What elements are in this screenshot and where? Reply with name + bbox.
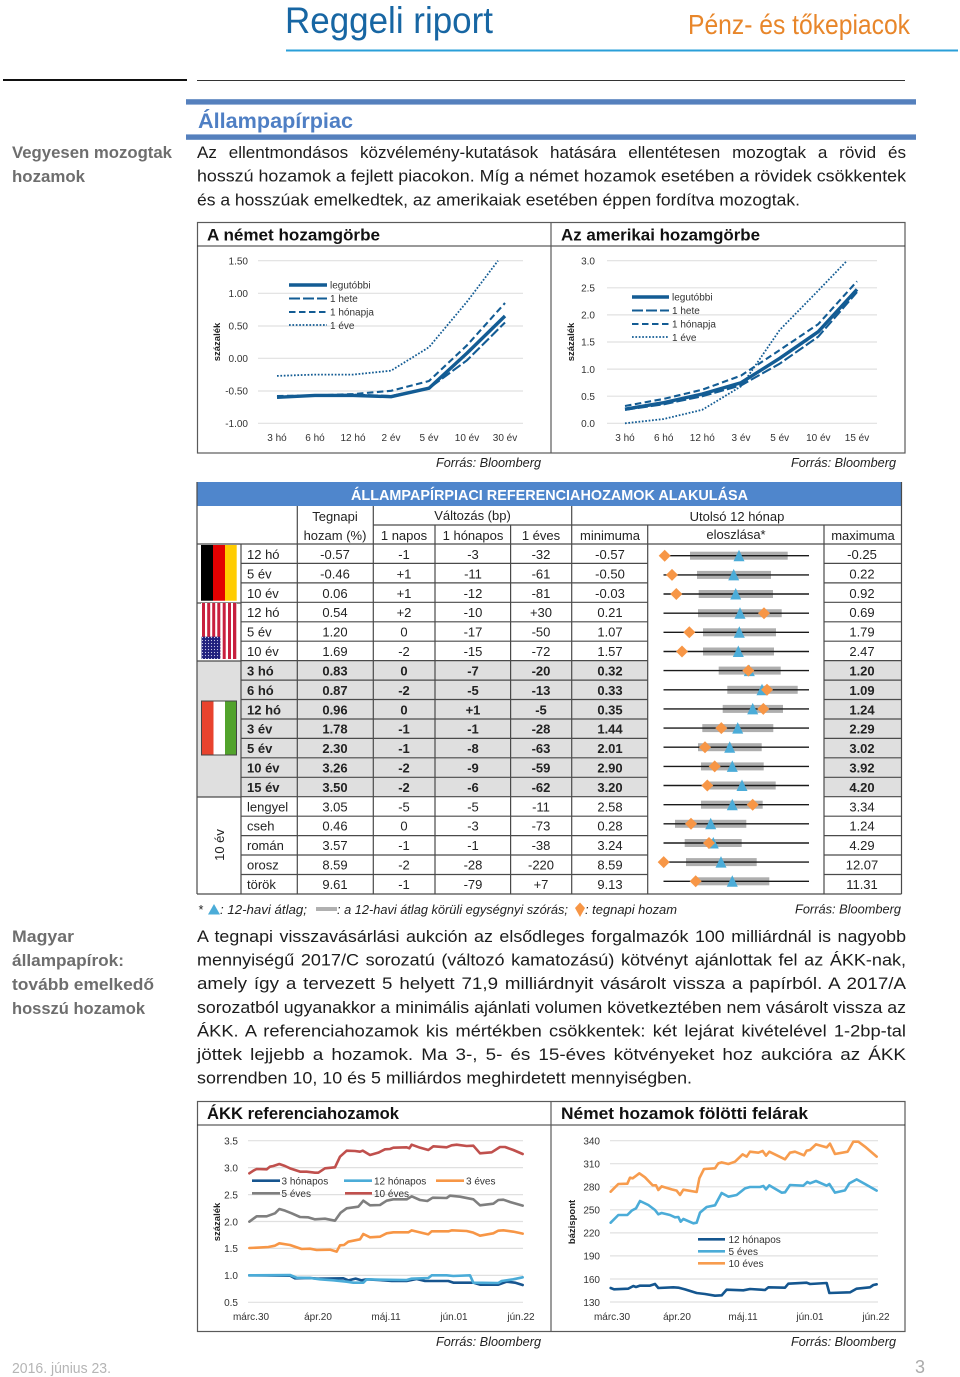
table footnote legend: : a 12-havi átlag körüli egységnyi szórás;: [337, 903, 568, 917]
x axis labels: [233, 1312, 535, 1323]
data rows: 3.34: [849, 799, 875, 814]
data rows: +1: [397, 586, 411, 601]
x axis labels: 10 év: [806, 433, 831, 444]
gridlines and y axis: 0.5: [581, 392, 595, 403]
gridlines and y axis: 3.0: [224, 1163, 238, 1174]
body paragraph: ÁKK. A referenciahozamok kis mértékben csökkentek: két lejárat kivételével 1-2bp-tal: [197, 1021, 906, 1040]
data rows: -2: [398, 858, 410, 873]
body paragraph: sorozatból ugyanakkor a minimális ajánlati volumen következtében nem vásárolt vissza az: [197, 998, 906, 1017]
chart: ÁKK referenciahozamok: [207, 1104, 535, 1323]
data rows: -20: [532, 664, 550, 678]
data rows: 12 hó: [247, 702, 281, 717]
data rows: -5: [467, 683, 479, 698]
data rows: 0.21: [597, 605, 623, 620]
legend: 1 éve: [330, 321, 355, 332]
x axis labels: 6 hó: [305, 433, 325, 444]
data rows: -1: [398, 838, 410, 853]
gridlines and y axis: 2.5: [224, 1190, 238, 1201]
data rows: -2: [398, 780, 410, 795]
data rows: 0.92: [849, 586, 875, 601]
data rows: 3.57: [322, 838, 348, 853]
body paragraph: mennyiségű 2017/C sorozatú (változó kamatozású) kötvényt ajánlottak fel az ÁKK-nak,: [197, 951, 906, 970]
column headers: 1 hónapos: [443, 528, 504, 543]
gridlines and y axis: [225, 256, 523, 430]
data rows: 1.20: [322, 625, 348, 640]
x axis labels: [267, 433, 517, 444]
x axis labels: 3 hó: [267, 433, 287, 444]
data rows: -1: [467, 722, 479, 737]
data rows: -12: [464, 586, 482, 601]
data rows: -38: [532, 838, 550, 853]
data rows: 11.31: [846, 877, 878, 892]
data rows: -3: [467, 819, 479, 834]
legend: 1 hónapja: [330, 308, 374, 318]
data rows: +30: [530, 605, 552, 620]
data rows: -62: [532, 780, 550, 795]
x axis labels: 2 év: [382, 433, 400, 444]
data rows: 1.78: [322, 722, 348, 737]
data rows: 1.07: [597, 625, 623, 640]
column headers: Tegnapi: [312, 509, 358, 524]
gridlines and y axis: 1.50: [229, 256, 248, 268]
gridlines and y axis: 1.5: [581, 338, 595, 349]
label: 10 év group: 10 év: [212, 829, 227, 861]
gridlines and y axis: 0.50: [229, 322, 248, 332]
data rows: +1: [466, 702, 480, 717]
data rows: +1: [397, 566, 411, 581]
column headers: 1 éves: [522, 528, 561, 543]
gridlines and y axis: 250: [583, 1206, 600, 1217]
grid lines: [197, 482, 902, 894]
data rows: 2.30: [322, 741, 348, 756]
legend: legutóbbi: [672, 292, 713, 304]
series lines: [625, 261, 857, 423]
legend: 10 éves: [728, 1259, 764, 1270]
data rows: -10: [464, 605, 482, 620]
gridlines and y axis: 1.0: [224, 1271, 238, 1282]
data rows: 0.83: [322, 664, 348, 678]
data rows: -220: [528, 858, 554, 873]
data rows: -5: [467, 799, 479, 814]
gridlines and y axis: 2.0: [581, 311, 595, 322]
x axis labels: 12 hó: [690, 433, 715, 444]
gridlines and y axis: 2.0: [224, 1217, 238, 1228]
x axis labels: [594, 1312, 890, 1323]
series lines: [249, 1145, 523, 1285]
gridlines and y axis: 1.0: [581, 365, 595, 376]
data rows: 1.79: [849, 625, 875, 640]
gridlines and y axis: 0.00: [229, 354, 248, 365]
data rows: -2: [398, 760, 410, 776]
legend: [632, 292, 716, 344]
chart title: Az amerikai hozamgörbe: [561, 226, 760, 244]
intro paragraph: hosszú hozamok a fejlett piacokon. Míg a német hozamok esetében a rövidek csökkentek: [197, 167, 907, 186]
intro paragraph: Az ellentmondásos közvélemény-kutatások hatására ellentétesen mozogtak a rövid és: [197, 143, 906, 162]
data rows: -11: [464, 566, 482, 581]
footer date: 2016. június 23.: [12, 1361, 111, 1377]
data rows: -61: [532, 566, 550, 581]
data rows: [247, 547, 878, 892]
source: Forrás: Bloomberg: [436, 456, 541, 470]
x axis labels: jún.01: [795, 1312, 824, 1323]
data rows: 8.59: [322, 858, 348, 873]
data rows: 5 év: [247, 741, 273, 756]
data rows: cseh: [247, 819, 274, 834]
data rows: -1: [398, 722, 410, 737]
icon: Hungarian flag: [202, 701, 236, 755]
icon: US flag: [201, 603, 237, 659]
series lines: [611, 1142, 877, 1296]
data rows: -6: [467, 780, 479, 795]
body paragraph: [196, 927, 907, 1088]
table footnote legend: Forrás: Bloomberg: [795, 902, 901, 916]
legend: 10 éves: [374, 1189, 409, 1200]
data rows: 1.24: [849, 819, 875, 834]
table footnote legend: : 12-havi átlag;: [220, 903, 308, 917]
data rows: +2: [397, 605, 411, 620]
data rows: 12 hó: [247, 605, 280, 620]
page number: 3: [915, 1357, 925, 1377]
data rows: román: [247, 838, 284, 853]
data rows: 0.87: [322, 683, 348, 698]
data rows: -0.03: [595, 586, 625, 601]
data rows: -32: [532, 547, 550, 562]
chart: Az amerikai hozamgörbe: [561, 226, 877, 444]
legend: legutóbbi: [330, 280, 371, 292]
x axis labels: jún.01: [439, 1312, 468, 1323]
section name: Pénz- és tőkepiacok: Pénz- és tőkepiacok: [688, 9, 911, 40]
gridlines and y axis: 130: [583, 1298, 600, 1309]
chart panels frame: yield curves: [197, 222, 905, 453]
data rows: 0.28: [597, 819, 623, 834]
data rows: 1.09: [849, 683, 875, 698]
data rows: 12.07: [846, 858, 878, 873]
data rows: -63: [532, 741, 550, 756]
intro paragraph: [197, 143, 907, 209]
data rows: 0.22: [849, 566, 875, 581]
data rows: 12 hó: [247, 547, 280, 562]
data rows: 1.20: [849, 664, 875, 678]
gridlines and y axis: 1.00: [229, 289, 248, 300]
data rows: 0.96: [322, 702, 348, 717]
column headers: eloszlása*: [706, 527, 766, 542]
data rows: -5: [398, 799, 410, 814]
data rows: -59: [532, 760, 550, 776]
legend: 1 hónapja: [672, 320, 716, 330]
data rows: -1: [398, 741, 410, 756]
data rows: -0.25: [847, 547, 877, 562]
distribution range chart: [658, 550, 809, 887]
data rows: -73: [532, 819, 550, 834]
gridlines and y axis: 160: [583, 1275, 600, 1286]
data rows: -17: [464, 625, 482, 640]
legend: [289, 280, 374, 332]
gridlines and y axis: 220: [583, 1229, 600, 1240]
data rows: 3 év: [247, 722, 273, 737]
data rows: 2.01: [597, 741, 623, 756]
side heading: Magyar állampapírok: tovább emelkedő: [12, 976, 154, 994]
section heading band: Állampapírpiac: [186, 99, 916, 140]
gridlines and y axis: 3.0: [581, 256, 595, 268]
data rows: 0: [400, 664, 408, 678]
x axis labels: 15 év: [845, 433, 869, 444]
icon: German flag: [201, 545, 237, 601]
intro paragraph: és a hosszúak emelkedtek, az amerikaiak esetében éppen fordítva mozogtak.: [197, 190, 800, 209]
table title bar: [197, 482, 902, 506]
side heading: Vegyesen mozogtak hozamok: [12, 144, 173, 186]
data rows: 1.24: [849, 702, 875, 717]
data rows: 0.32: [597, 664, 623, 678]
data rows: -1: [467, 838, 479, 853]
source: Forrás: Bloomberg: [436, 1335, 541, 1349]
data rows: -5: [535, 702, 547, 717]
data rows: +7: [534, 877, 548, 892]
data rows: 5 év: [247, 625, 272, 640]
data rows: 15 év: [247, 780, 280, 795]
x axis labels: ápr.20: [304, 1312, 332, 1323]
data rows: 0.69: [849, 605, 875, 620]
column headers: minimuma: [580, 528, 641, 543]
data rows: 0.35: [597, 702, 623, 717]
data rows: -7: [467, 664, 479, 678]
x axis labels: máj.11: [371, 1312, 401, 1323]
data rows: 0: [400, 625, 408, 640]
data rows: -0.50: [595, 566, 625, 581]
legend: 12 hónapos: [728, 1235, 781, 1246]
data rows: -13: [532, 683, 550, 698]
data rows: -28: [464, 858, 482, 873]
data rows: -72: [532, 644, 550, 659]
gridlines and y axis: [224, 1136, 523, 1309]
source: Forrás: Bloomberg: [791, 456, 896, 470]
data rows: 3.20: [597, 780, 623, 795]
data rows: 0.46: [322, 819, 348, 834]
legend: 1 hete: [672, 306, 700, 317]
data rows: 3 hó: [247, 664, 274, 678]
column headers: Változás (bp): [434, 508, 511, 523]
data rows: -79: [464, 877, 482, 892]
data rows: 0.33: [597, 683, 623, 698]
data rows: 3.26: [322, 760, 348, 776]
side heading: Magyar állampapírok: hosszú hozamok: [12, 1000, 146, 1018]
gridlines and y axis: 310: [583, 1160, 600, 1170]
legend: 12 hónapos: [374, 1176, 426, 1187]
table footnote legend: *: [198, 903, 204, 917]
gridlines and y axis: 0.5: [224, 1298, 238, 1309]
data rows: orosz: [247, 858, 279, 873]
legend: 1 hete: [330, 294, 358, 305]
chart title: Német hozamok fölötti felárak: [561, 1104, 809, 1123]
data rows: lengyel: [247, 799, 288, 814]
x axis labels: jún.22: [861, 1312, 890, 1323]
data rows: 3.24: [597, 838, 623, 853]
series lines: [277, 261, 505, 397]
legend: 1 éve: [672, 333, 697, 344]
data rows: -9: [467, 760, 479, 776]
data rows: 2.47: [849, 644, 875, 659]
side heading: Magyar állampapírok: Magyar: [12, 928, 75, 946]
gridlines and y axis: 190: [583, 1252, 600, 1263]
column headers: 1 napos: [381, 528, 428, 543]
side heading: Vegyesen mozogtak hozamok: hozamok: [12, 168, 86, 186]
data rows: -3: [467, 547, 479, 562]
chart panels frame: bottom charts: [197, 1101, 905, 1332]
data rows: 10 év: [247, 586, 279, 601]
Hungarian rows shading: [197, 661, 902, 797]
data rows: 4.29: [849, 838, 875, 853]
gridlines and y axis: [583, 1136, 878, 1309]
gridlines and y axis: -1.00: [225, 419, 248, 430]
header: [285, 0, 958, 52]
column headers: [304, 508, 896, 543]
gridlines and y axis: 1.5: [224, 1244, 238, 1255]
section heading band: Állampapírpiac: Állampapírpiac: [198, 108, 353, 133]
data rows: 3.05: [322, 799, 348, 814]
data rows: 6 hó: [247, 683, 274, 698]
data rows: -1: [398, 877, 410, 892]
x axis labels: 3 év: [732, 433, 750, 444]
data rows: 9.13: [597, 877, 623, 892]
data rows: 2.58: [597, 799, 623, 814]
x axis labels: 10 év: [455, 433, 479, 444]
data rows: 0.06: [322, 586, 348, 601]
legend: 3 hónapos: [282, 1176, 328, 1187]
data rows: -81: [532, 586, 550, 601]
data rows: 2.90: [597, 760, 623, 776]
x axis labels: máj.11: [728, 1312, 758, 1323]
y axis title: százalék: [212, 322, 223, 361]
x axis labels: márc.30: [594, 1312, 630, 1323]
table footnote legend: [198, 902, 901, 917]
data rows: -50: [532, 625, 550, 640]
y axis title: százalék: [566, 322, 577, 361]
legend: 5 éves: [728, 1247, 758, 1258]
chart title: ÁKK referenciahozamok: [207, 1104, 400, 1123]
side heading: Magyar állampapírok: állampapírok:: [12, 952, 124, 970]
data rows: -0.57: [320, 547, 350, 562]
column headers: hozam (%): [304, 528, 366, 543]
x axis labels: [615, 433, 869, 444]
data rows: -15: [464, 644, 482, 659]
data rows: 8.59: [597, 858, 623, 873]
body paragraph: amely így a tervezett 5 helyett 71,9 milliárdnyit vásárolt vissza a papírból. A 2017/A: [197, 974, 907, 993]
legend: 3 éves: [466, 1176, 495, 1187]
table footnote legend: : tegnapi hozam: [585, 903, 677, 917]
side heading: Vegyesen mozogtak hozamok: Vegyesen mozogtak: [12, 144, 173, 162]
source: Forrás: Bloomberg: [791, 1335, 896, 1349]
x axis labels: jún.22: [506, 1312, 535, 1323]
data rows: -11: [532, 799, 550, 814]
y axis title: százalék: [212, 1202, 223, 1241]
column headers: Utolsó 12 hónap: [690, 509, 784, 524]
body paragraph: A tegnapi visszavásárlási aukción az elsődleges forgalmazók 100 milliárdnál is nagyobb: [197, 927, 906, 946]
chart: A német hozamgörbe: [207, 226, 523, 444]
data rows: 10 év: [247, 644, 279, 659]
x axis labels: 12 hó: [340, 433, 366, 444]
data rows: -2: [398, 683, 410, 698]
gridlines and y axis: 0.0: [581, 419, 595, 430]
data rows: -28: [532, 722, 550, 737]
body paragraph: jöttek lejjebb a hozamok. Ma 3-, 5- és 15-éves kötvényeket hoz aukcióra az ÁKK: [196, 1045, 906, 1064]
data rows: török: [247, 877, 276, 892]
x axis labels: 3 hó: [615, 433, 635, 444]
column headers: maximuma: [831, 528, 896, 543]
data rows: 4.20: [849, 780, 875, 795]
data rows: 1.44: [597, 722, 623, 737]
data rows: 10 év: [247, 760, 280, 776]
body paragraph: sorrendben 10, 10 és 5 milliárdos meghirdetett mennyiségben.: [197, 1069, 692, 1088]
gridlines and y axis: 340: [583, 1136, 600, 1148]
data rows: 2.29: [849, 722, 875, 737]
data rows: 5 év: [247, 566, 272, 581]
data rows: 3.92: [849, 760, 875, 776]
gridlines and y axis: 3.5: [224, 1136, 238, 1148]
chart: Német hozamok fölötti felárak: [561, 1104, 890, 1323]
data rows: -2: [398, 644, 410, 659]
data rows: 3.50: [322, 780, 348, 795]
chart title: A német hozamgörbe: [207, 226, 380, 244]
gridlines and y axis: 2.5: [581, 284, 595, 294]
data rows: 0: [400, 819, 408, 834]
legend: [698, 1235, 781, 1270]
side heading: Magyar állampapírok: [12, 928, 154, 1018]
legend: 5 éves: [282, 1189, 311, 1200]
header rule: [286, 50, 958, 52]
gridlines and y axis: [581, 256, 877, 430]
data rows: 3.02: [849, 741, 875, 756]
y axis title: bázispont: [567, 1199, 578, 1244]
x axis labels: ápr.20: [663, 1312, 691, 1323]
data rows: 9.61: [322, 877, 348, 892]
x axis labels: 5 év: [770, 433, 789, 444]
x axis labels: 30 év: [493, 433, 517, 444]
data rows: -1: [398, 547, 410, 562]
data rows: 1.57: [597, 644, 623, 659]
data rows: -8: [467, 741, 479, 756]
table: Állampapírpiaci referenciahozamok alakulása: [197, 482, 902, 894]
legend: [252, 1176, 495, 1200]
table title bar: ÁLLAMPAPÍRPIACI REFERENCIAHOZAMOK ALAKULÁSA: [351, 487, 748, 504]
gridlines and y axis: 280: [583, 1183, 600, 1194]
data rows: -0.57: [595, 547, 625, 562]
data rows: 0.54: [322, 605, 348, 620]
data rows: 1.69: [322, 644, 348, 659]
x axis labels: 6 hó: [654, 433, 674, 444]
gridlines and y axis: -0.50: [225, 386, 248, 398]
data rows: -0.46: [320, 566, 350, 581]
x axis labels: márc.30: [233, 1312, 269, 1323]
title: Reggeli riport: Reggeli riport: [285, 0, 494, 41]
x axis labels: 5 év: [420, 433, 438, 444]
data rows: 0: [400, 702, 408, 717]
